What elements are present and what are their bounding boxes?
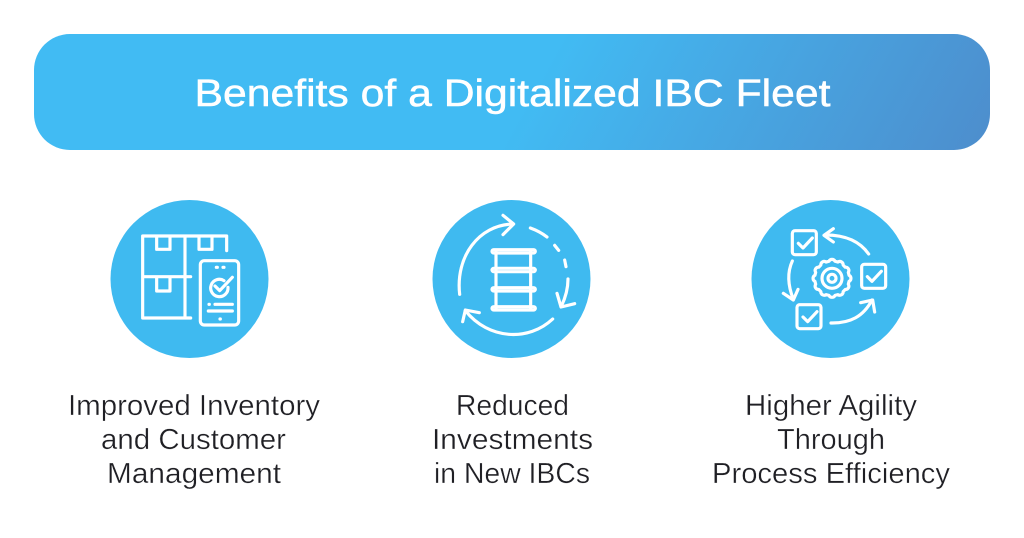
text: reduced investments: in New IBCs	[434, 458, 590, 490]
text: improved inventory: Improved Inventory	[68, 390, 321, 422]
text: higher agility	[712, 390, 951, 490]
icon: boxes and phone	[110, 200, 268, 358]
text: improved inventory: Management	[107, 458, 281, 490]
text: reduced investments: Investments	[432, 424, 593, 456]
text: higher agility: Higher Agility	[745, 390, 918, 422]
icon: gear with process checklist	[752, 200, 910, 358]
text: reduced investments	[432, 390, 593, 490]
text: higher agility: Process Efficiency	[712, 458, 951, 490]
text: reduced investments: Reduced	[456, 390, 569, 422]
text: improved inventory	[68, 390, 321, 490]
title banner	[34, 34, 990, 150]
text: improved inventory: and Customer	[101, 424, 286, 456]
title: Benefits of a Digitalized IBC Fleet	[194, 73, 831, 115]
icon: barrel with circular arrows	[432, 200, 590, 358]
text: higher agility: Through	[777, 424, 885, 456]
